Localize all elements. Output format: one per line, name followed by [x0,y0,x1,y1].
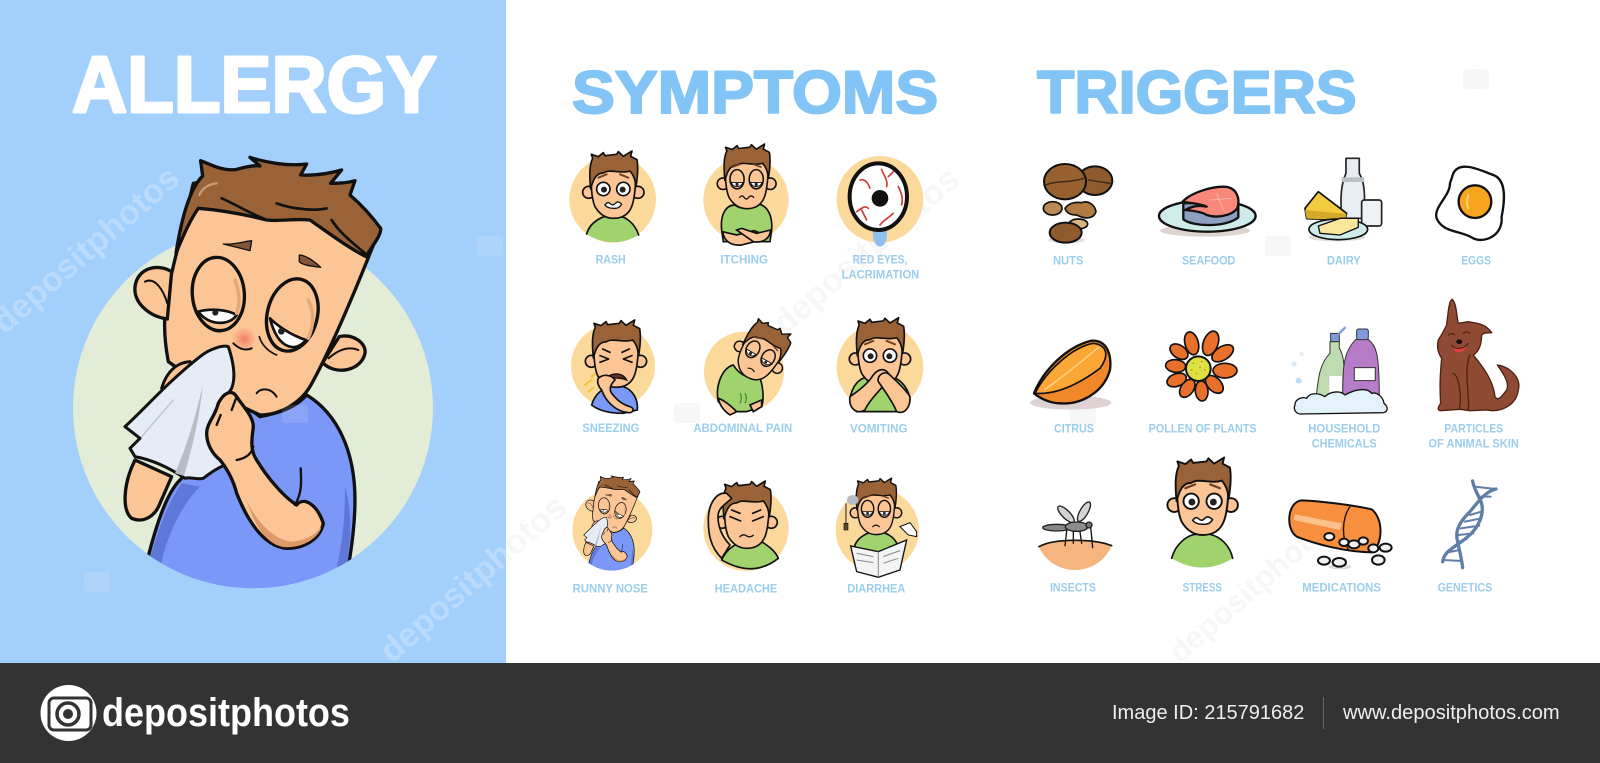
logo wordmark: depositphotos [102,691,350,735]
trigger: insects: INSECTS [1050,582,1096,595]
trigger: pollen flower [1149,329,1257,435]
panel: triggers row 2 [1030,299,1519,436]
symptom: rash [569,151,656,266]
trigger: genetics dna: GENETICS [1438,582,1492,595]
trigger: dog: PARTICLES [1444,423,1503,436]
green circle behind character [73,228,433,588]
label: chemicals second line: CHEMICALS [1312,437,1377,451]
character blowing nose into tissue [125,157,381,607]
heading: symptoms: SYMPTOMS [572,60,938,127]
symptom: runny nose [572,476,652,595]
symptom: diarrhea [836,478,919,595]
trigger: eggs [1436,167,1504,268]
watermarks and camera marks on white area: depositphotos [372,488,574,670]
symptom: red eyes, lacrimation: LACRIMATION [842,269,919,282]
footer bar [0,663,1600,763]
symptom: diarrhea: DIARRHEA [847,582,906,595]
panel: allergy [0,0,506,663]
panel: triggers row 1 [1043,158,1504,268]
trigger: dairy [1305,158,1382,268]
symptom: red eyes, lacrimation [837,156,923,282]
heading: triggers: TRIGGERS [1037,59,1357,126]
watermarks and camera marks on white area [572,144,1520,577]
trigger: nuts [1043,164,1112,268]
trigger: medications [1289,500,1392,595]
panel: triggers row 3 [1039,458,1496,595]
symptom: sneezing [571,320,655,435]
trigger: nuts: NUTS [1053,255,1084,268]
logo icon: camera [40,685,96,741]
symptom: rash: RASH [596,253,626,266]
symptom: red eyes, lacrimation: RED EYES, [853,253,907,266]
trigger: genetics dna [1438,481,1496,595]
symptom: vomiting: VOMITING [850,423,908,436]
trigger: household chemicals: HOUSEHOLD [1308,423,1380,436]
trigger: dog [1438,299,1519,436]
symptom: abdominal pain [693,312,800,435]
image id: Image ID: 215791682 [1112,702,1304,724]
trigger: seafood: SEAFOOD [1182,255,1235,268]
watermarks and camera marks on white area: depositphotos [765,160,967,342]
symptom: vomiting [837,318,923,436]
trigger: stress: STRESS [1183,582,1222,595]
footer divider [1323,697,1324,729]
trigger: seafood [1159,187,1256,268]
trigger: dairy: DAIRY [1327,255,1361,268]
watermarks on blue panel: depositphotos [372,488,574,670]
symptom: sneezing: SNEEZING [582,422,639,435]
trigger: citrus: CITRUS [1054,422,1094,435]
watermarks and camera marks on white area: depositphotos [1162,503,1346,669]
symptom: itching: ITCHING [720,253,768,266]
website url: www.depositphotos.com [1342,702,1560,724]
trigger: stress [1167,458,1238,595]
symptom: headache: HEADACHE [715,582,778,595]
symptom: itching [703,144,789,266]
symptom: headache [703,481,789,595]
watermarks on blue panel [0,159,574,670]
symptom: runny nose: RUNNY NOSE [573,582,648,595]
label: animal skin second line: OF ANIMAL SKIN [1428,437,1519,451]
panel: symptoms grid [569,144,923,595]
trigger: medications: MEDICATIONS [1302,582,1381,595]
heading: allergy: ALLERGY [72,39,437,129]
camera watermarks on blue panel [84,236,503,592]
trigger: insects [1039,500,1112,595]
symptom: abdominal pain: ABDOMINAL PAIN [693,422,792,435]
trigger: eggs: EGGS [1461,255,1491,268]
trigger: household chemicals [1291,328,1387,436]
trigger: citrus [1030,341,1111,435]
trigger: pollen flower: POLLEN OF PLANTS [1149,422,1257,435]
